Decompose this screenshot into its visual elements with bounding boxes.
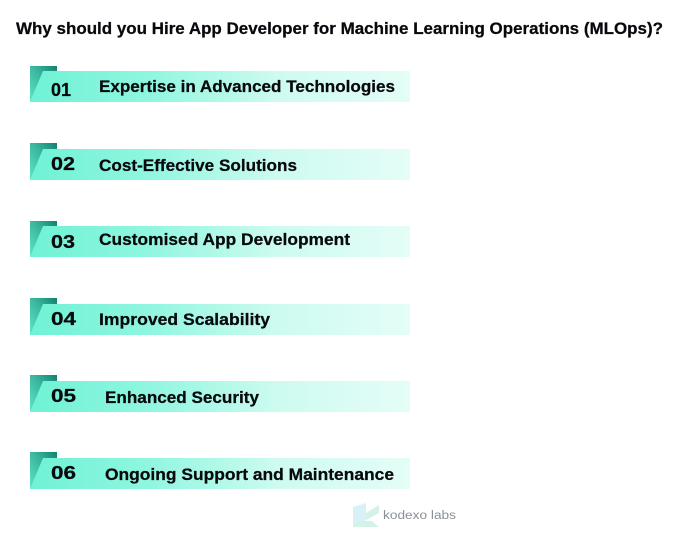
panel: item 05: Enhanced Security bbox=[105, 388, 260, 407]
panel: item 01: 01 bbox=[51, 79, 71, 100]
panel: item 05: 05 bbox=[51, 385, 76, 406]
panel: item 02: 02 bbox=[51, 153, 75, 174]
logo: kodexo labs bbox=[353, 503, 456, 527]
panel: item 06: 06 bbox=[51, 462, 76, 483]
title: Why should you Hire App Developer for Machine Learning Operations (MLOps)? bbox=[16, 20, 663, 38]
panel: item 02 bbox=[30, 143, 410, 180]
panel: item 06 bbox=[30, 452, 410, 489]
icon: logo mark bbox=[353, 503, 379, 527]
panel: item 06: Ongoing Support and Maintenance bbox=[105, 465, 394, 484]
panel: item 03: 03 bbox=[51, 231, 75, 252]
logo wordmark: kodexo labs bbox=[383, 510, 456, 522]
panel: item 04 bbox=[30, 298, 410, 335]
panel: item 01: Expertise in Advanced Technologies bbox=[99, 77, 395, 96]
panel: item 01 bbox=[30, 66, 410, 102]
panel: item 04: Improved Scalability bbox=[99, 310, 271, 329]
panel: item 03: Customised App Development bbox=[99, 230, 350, 249]
panel: item 04: 04 bbox=[51, 308, 77, 329]
panel: item 02: Cost-Effective Solutions bbox=[99, 156, 297, 175]
panel: item 03 bbox=[30, 221, 410, 257]
panel: item 05 bbox=[30, 375, 410, 412]
